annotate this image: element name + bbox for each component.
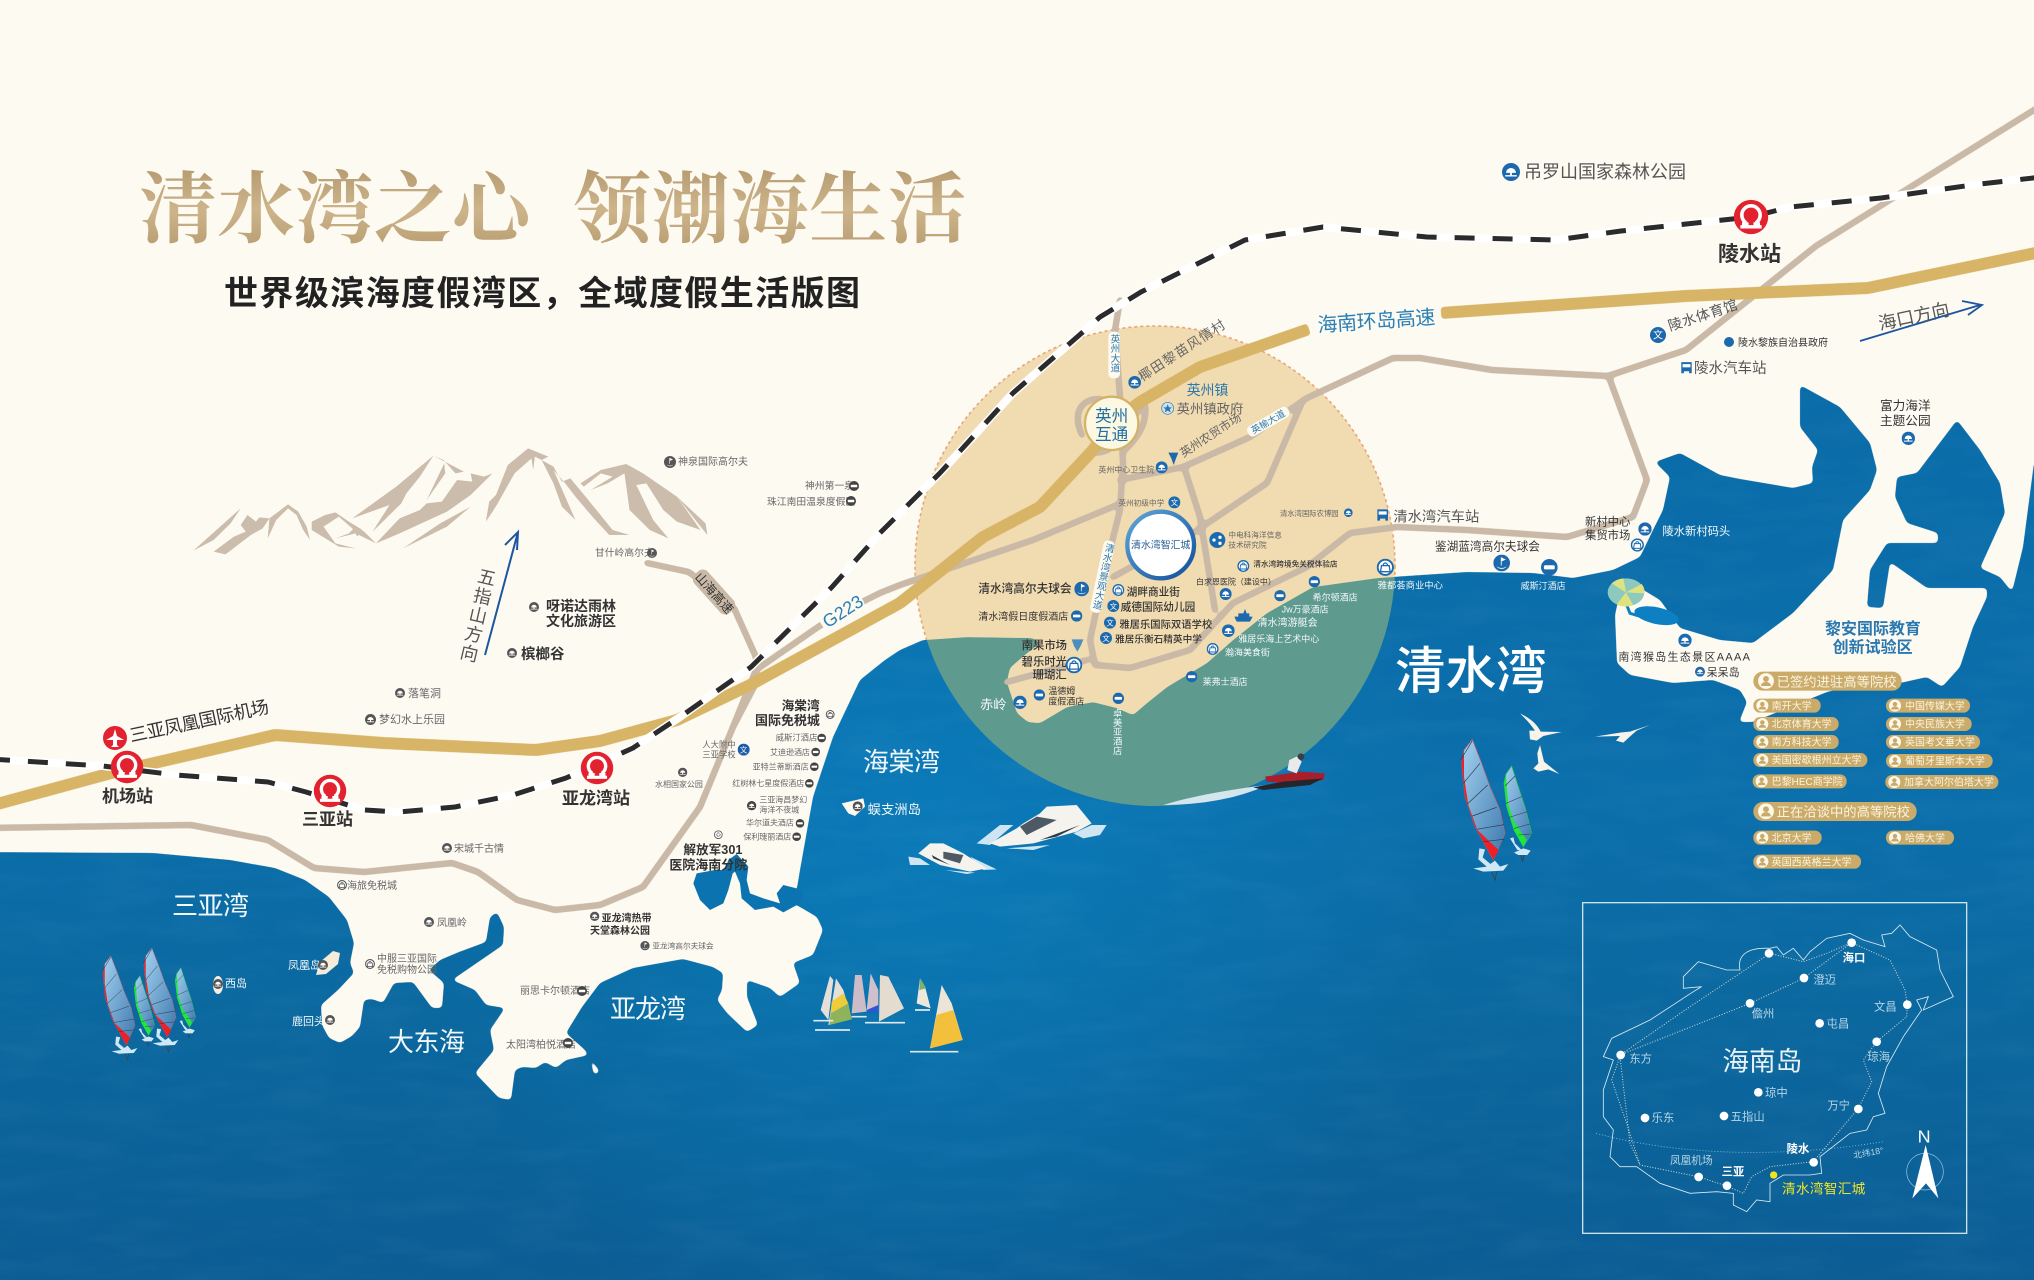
poi: RDFZ [702,740,750,760]
poi: Lingshui stadium: 陵水体育馆 [1666,296,1739,334]
poi: Hilton: 希尔顿酒店 [1313,591,1358,602]
uni: 哈佛大学 [1905,831,1945,844]
poi: Westin: 威斯汀酒店 [776,733,817,743]
poi: CETC: 中电科海洋信息 [1228,529,1282,539]
title: 清水湾之心 [139,166,539,253]
poi: Yalong forest: 亚龙湾热带 [602,912,652,925]
uni [1753,855,1861,869]
poi: Monkey island: 南湾猴岛生态景区AAAA [1618,650,1751,664]
poi: PLA 301: 医院海南分院 [669,857,747,872]
latitude line [1596,1133,1883,1152]
poi: Songcheng: 宋城千古情 [454,842,504,855]
east coast POIs [1377,508,1566,700]
poi: PLA 301: 解放军301 [683,842,742,857]
poi: JW Marriott: Jw万豪酒店 [1282,603,1329,614]
poi: county government: 陵水黎族自治县政府 [1738,336,1828,349]
poi: Qingshui golf: 清水湾高尔夫球会 [978,581,1072,595]
bay labels: 亚龙湾 [610,994,686,1024]
west POIs [102,455,859,1051]
poi: Haily duty free: 海旅免税城 [347,879,397,892]
poi: West island: 西岛 [225,976,247,990]
poi: Xincun market: 集贸市场 [1585,528,1630,542]
north arrow: N [1918,1126,1931,1146]
poi: West island [213,976,247,994]
poi: farmers market: 英州农贸市场 [1177,410,1244,460]
road label: Shanhai expressway: 山海高速 [692,569,737,617]
poi: Daidai island: 呆呆岛 [1707,665,1740,679]
interchange badge [1085,397,1138,450]
label: Li'an zone: 创新试验区 [1833,638,1913,657]
direction: Wuzhishan arrow: 五指山方向 [456,566,498,665]
uni [1886,699,1970,713]
city labels: 凤凰机场 [1670,1154,1713,1167]
station: Lingshui: 陵水站 [1718,243,1781,266]
poi: Yadu mall [1378,560,1443,591]
station: Sanya [302,775,353,829]
poi: tax free store: 清水湾跨境免关税体验店 [1253,559,1338,569]
poi: CETC [1209,529,1282,549]
uni [1886,754,1993,768]
poi: Monkey island [1618,634,1751,664]
uni: 加拿大阿尔伯塔大学 [1904,776,1994,789]
poi: Wuzhizhou: 蜈支洲岛 [868,802,921,817]
poi: Yanoda: 文化旅游区 [546,613,616,629]
title [139,166,966,253]
heading pill: negotiating universities: 正在洽谈中的高等院校 [1777,804,1910,820]
city labels: 琼中 [1765,1086,1788,1100]
poi: Shenquan golf: 神泉国际高尔夫 [678,455,748,468]
city labels: 万宁 [1827,1098,1850,1112]
station: Sanya: 三亚站 [302,810,353,829]
poi: town government: 英州镇政府 [1177,400,1243,416]
poi: Westin east [1521,559,1566,591]
poi: Xincun market: 新村中心 [1585,515,1630,529]
bay labels: 海棠湾 [863,747,940,777]
station: Yalong Bay: 亚龙湾站 [562,788,630,808]
poi: Luhuitou: 鹿回头 [292,1014,325,1028]
umbrella beach [1608,578,1681,629]
road pill: Yingzhou avenue: 英州大道 [1108,334,1120,373]
uni: 葡萄牙里斯本大学 [1905,755,1985,768]
interchange badge: 英州 [1095,407,1128,426]
uni [1753,774,1847,788]
uni [1753,699,1821,713]
land mass [0,325,2034,1100]
poi: Shuixiang park: 水相国家公园 [655,779,703,789]
city labels: 东方 [1629,1052,1652,1066]
poi: CETC: 技术研究院 [1228,539,1267,549]
poi: lakeside street [1113,585,1180,599]
uni: 巴黎HEC商学院 [1772,775,1843,788]
poi: Wyndham: 度假酒店 [1048,696,1084,707]
poi: R&F ocean park: 富力海洋 [1880,398,1931,413]
Qingshui Bay circle details [978,317,1358,756]
jet ski with spray [1163,753,1325,805]
project marker: 清水湾智汇城 [1131,539,1190,552]
direction: Haikou arrow [1860,299,1982,341]
city labels: 儋州 [1752,1008,1774,1021]
poi: Lingshui stadium [1650,296,1739,343]
poi: Yingzhou school [1118,496,1180,508]
road pill: Yingyu avenue: 英榆大道 [1249,408,1287,436]
poi: Agile Hengshi: 雅居乐衡石精英中学 [1115,634,1202,646]
poi: Ganshiling golf: 甘什岭高尔夫 [595,546,654,559]
poi: food street: 瀚海美食街 [1225,647,1270,658]
uni [1753,753,1867,767]
label: Qingshui Bay: 清水湾 [1395,643,1547,700]
expressway: Hainan ring [0,250,2034,806]
poi: Daidai island [1695,665,1740,679]
poi: Fenghuangling [424,916,467,929]
road pill: landscape avenue: 清水湾景观大道 [1090,541,1116,611]
poi: Luobi cave [395,686,441,700]
island: Fenghuang [316,951,340,975]
bay labels [172,747,940,1057]
sailboats: Yalong bay [813,973,963,1052]
poi: Songcheng [442,842,504,855]
poi: Park Hyatt: 太阳湾柏悦酒店 [506,1038,576,1051]
poi: Raffles: 莱弗士酒店 [1203,676,1248,687]
north arrow [1907,1126,1943,1198]
north-east POIs [1502,162,1828,377]
poi: Nantian hot spring: 珠江南田温泉度假区 [767,495,855,508]
uni [1886,735,1980,749]
poi: Lanwan golf [1435,540,1540,571]
poi: yacht club [1234,609,1318,629]
Xincun and Li'an [1585,398,1998,869]
city labels: 三亚 [1722,1166,1744,1179]
uni list 2 [1753,831,1954,869]
uni: 中国传媒大学 [1905,699,1965,712]
heading pill: signed universities [1753,672,1902,691]
poi: Haichang: 三亚海昌梦幻 [759,795,807,805]
city labels [1629,951,1897,1179]
poi: Coral mall: 珊瑚汇 [1033,668,1067,682]
poi: agri park: 清水湾国际农博园 [1280,509,1339,518]
poi: Wuzhizhou [842,798,921,817]
minor roads [0,100,2034,910]
poi: Betel valley [507,645,565,663]
city dots [1616,938,1912,1190]
poi: Hilton [1309,576,1358,602]
yacht: large [977,805,1107,850]
poi: lakeside street: 湖畔商业街 [1127,586,1180,599]
poi: Rosewood: 保利瑰丽酒店 [743,831,791,841]
poi: Agile bilingual [1104,617,1213,631]
uni: 英国西英格兰大学 [1772,855,1852,868]
yacht: small [908,843,997,874]
poi: Yanoda [529,598,616,629]
poi: Nanguo market [1022,638,1083,652]
bay labels: 大东海 [388,1027,465,1057]
uni [1886,717,1972,731]
seagulls [1520,713,1650,774]
poi: Raffles [1186,671,1248,687]
poi: CDF mall: 免税购物公园 [377,963,437,976]
poi: bus station: 清水湾汽车站 [1393,508,1479,525]
poi: JW Marriott [1274,590,1329,614]
city labels: 文昌 [1874,1000,1897,1014]
poi: food street [1207,644,1270,658]
station: airport: 机场站 [102,787,153,806]
uni: 南方科技大学 [1772,736,1832,749]
project label: 清水湾智汇城 [1782,1180,1866,1196]
uni [1885,775,1998,789]
windsurfers: Qingshui bay [1461,739,1532,880]
poi: Luhuitou [292,1014,335,1028]
poi: Coral mall: 碧乐时光 [1022,655,1067,669]
poi: Lingshui bus: 陵水汽车站 [1694,360,1766,377]
project marker [1127,512,1194,578]
station: Yalong Bay [562,752,630,808]
inset: Hainan island map [1583,903,1967,1233]
poi: R&F ocean park: 主题公园 [1880,414,1931,428]
city labels: 琼海 [1867,1050,1890,1064]
city labels: 屯昌 [1827,1017,1849,1030]
poi: Wyndham: 温德姆 [1048,685,1075,696]
bay labels: 三亚湾 [172,891,249,921]
poi: Lanwan golf: 鉴湖蓝湾高尔夫球会 [1435,540,1540,554]
poi: art centre: 雅居乐海上艺术中心 [1238,633,1319,644]
poi: Diaoluo forest: 吊罗山国家森林公园 [1524,162,1686,182]
poi: Yalong forest [590,912,652,937]
railway [0,176,2034,812]
uni list [1753,699,1998,789]
poi: Yalong golf: 亚龙湾高尔夫球会 [652,941,714,951]
poi: tax free store [1238,559,1338,571]
poi: Haichang: 海洋不夜城 [759,804,799,814]
uni: 南开大学 [1772,699,1812,712]
island name: 海南岛 [1722,1047,1802,1077]
city labels: 五指山 [1731,1110,1765,1124]
Haitang bay POIs [590,698,921,951]
poi: coconut village: 椰田黎苗风情村 [1136,317,1228,384]
poi: water park: 梦幻水上乐园 [379,713,445,726]
poi: Jumeirah: 卓美亚酒店 [1112,708,1122,756]
subtitle: 世界级滨海度假湾区，全域度假生活版图 [224,275,860,313]
poi: Atlantis: 亚特兰蒂斯酒店 [753,761,809,771]
poi: first spring: 神州第一泉 [805,479,854,492]
poi: duty free city: 海棠湾 [782,698,820,713]
uni: 中央民族大学 [1905,718,1965,731]
poi: Phoenix island: 凤凰岛 [288,958,321,972]
poi: health centre [1098,461,1168,474]
poi: Coral mall [1022,655,1081,682]
station: airport [102,751,153,806]
city labels: 陵水 [1787,1141,1810,1155]
poi: art centre [1222,624,1319,644]
poi: Waldorf: 华尔道夫酒店 [746,818,794,828]
heading pill: negotiating universities [1753,802,1917,821]
poi: Betel valley: 槟榔谷 [521,645,565,663]
road label: highway: 海南环岛高速 [1317,306,1436,337]
poi: Mangrove: 红树林七星度假酒店 [732,778,804,788]
project dot [1770,1171,1777,1179]
road pill: Yingyu avenue [1245,405,1291,438]
rail lines [1612,943,1907,1193]
interchange badge: 互通 [1095,425,1129,444]
poi: yacht club: 清水湾游艇会 [1258,616,1318,629]
poi: Holiday hotel: 清水湾假日度假酒店 [978,610,1068,623]
label: Li'an zone: 黎安国际教育 [1825,619,1921,638]
uni [1753,717,1839,731]
poi: Ritz Carlton: 丽思卡尔顿酒店 [520,984,590,997]
poi: CDF mall: 中服三亚国际 [377,952,437,965]
uni [1753,735,1839,749]
poi: Nanguo market: 南果市场 [1022,638,1067,652]
direction: Wuzhishan arrow [456,532,518,665]
poi: Agile Hengshi [1100,632,1202,646]
uni [1753,831,1822,845]
poi: Edition: 艾迪逊酒店 [770,747,810,757]
poi: PLA 301 [669,831,747,872]
title: 领潮海生活 [573,166,966,253]
city labels: 海口 [1843,951,1865,965]
poi: duty free city: 国际免税城 [755,713,820,728]
city labels: 北纬18° [1852,1144,1884,1160]
poi: Wyndham [1034,685,1084,707]
poi: Yalong forest: 天堂森林公园 [590,924,650,937]
poi: Westin east: 威斯汀酒店 [1521,580,1566,591]
poi: CDF mall [366,952,437,976]
poi: RDFZ: 人大附中 [702,740,736,750]
poi: Luobi cave: 落笔洞 [408,686,441,700]
uni: 北京体育大学 [1772,718,1832,731]
windsurfers: Sanya bay [102,948,196,1060]
poi: Haichang [747,795,807,814]
yacht: large and small [908,805,1107,874]
poi: WEIDE kindergarten: 威德国际幼儿园 [1121,601,1195,614]
heading pill: signed universities: 已签约进驻高等院校 [1777,673,1897,689]
poi: Fenghuangling: 凤凰岭 [437,916,467,929]
city labels: 澄迈 [1813,972,1836,986]
poi: Shuixiang park [655,768,703,789]
poi: RDFZ: 三亚学校 [702,750,736,760]
poi: Chiling: 赤岭 [980,697,1007,712]
poi: Chiling [980,696,1027,712]
uni: 英国考文垂大学 [1905,736,1975,749]
poi: health centre: 英州中心卫生院 [1098,464,1154,474]
poi: Yingzhou school: 英州初级中学 [1118,498,1165,508]
poi: Xincun market [1585,515,1652,551]
label: Yingzhou town: 英州镇 [1187,382,1228,398]
poi: R&F ocean park [1880,398,1931,445]
island outline [1603,925,1953,1212]
uni [1886,831,1954,845]
poi: duty free city [755,698,834,728]
uni: 北京大学 [1772,831,1812,844]
poi: airport: 三亚凤凰国际机场 [128,697,271,746]
uni: 美国密歇根州立大学 [1772,754,1862,767]
label: Li'an zone [1825,619,1921,657]
poi: Jumeirah [1112,693,1124,756]
poi: Yanoda: 呀诺达雨林 [546,598,616,614]
road label: G223: G223 [819,591,867,632]
direction: Haikou arrow: 海口方向 [1877,299,1951,334]
poi: Bethune hospital [1196,577,1276,600]
mountains [193,448,707,554]
station: Lingshui [1718,200,1781,266]
poi: Yadu mall: 雅都荟商业中心 [1378,580,1443,591]
poi: Xincun pier: 陵水新村码头 [1662,524,1730,538]
poi: Agile bilingual: 雅居乐国际双语学校 [1119,618,1213,631]
poi: Bethune hospital: 白求恩医院（建设中） [1196,577,1276,587]
city labels: 乐东 [1652,1112,1674,1125]
